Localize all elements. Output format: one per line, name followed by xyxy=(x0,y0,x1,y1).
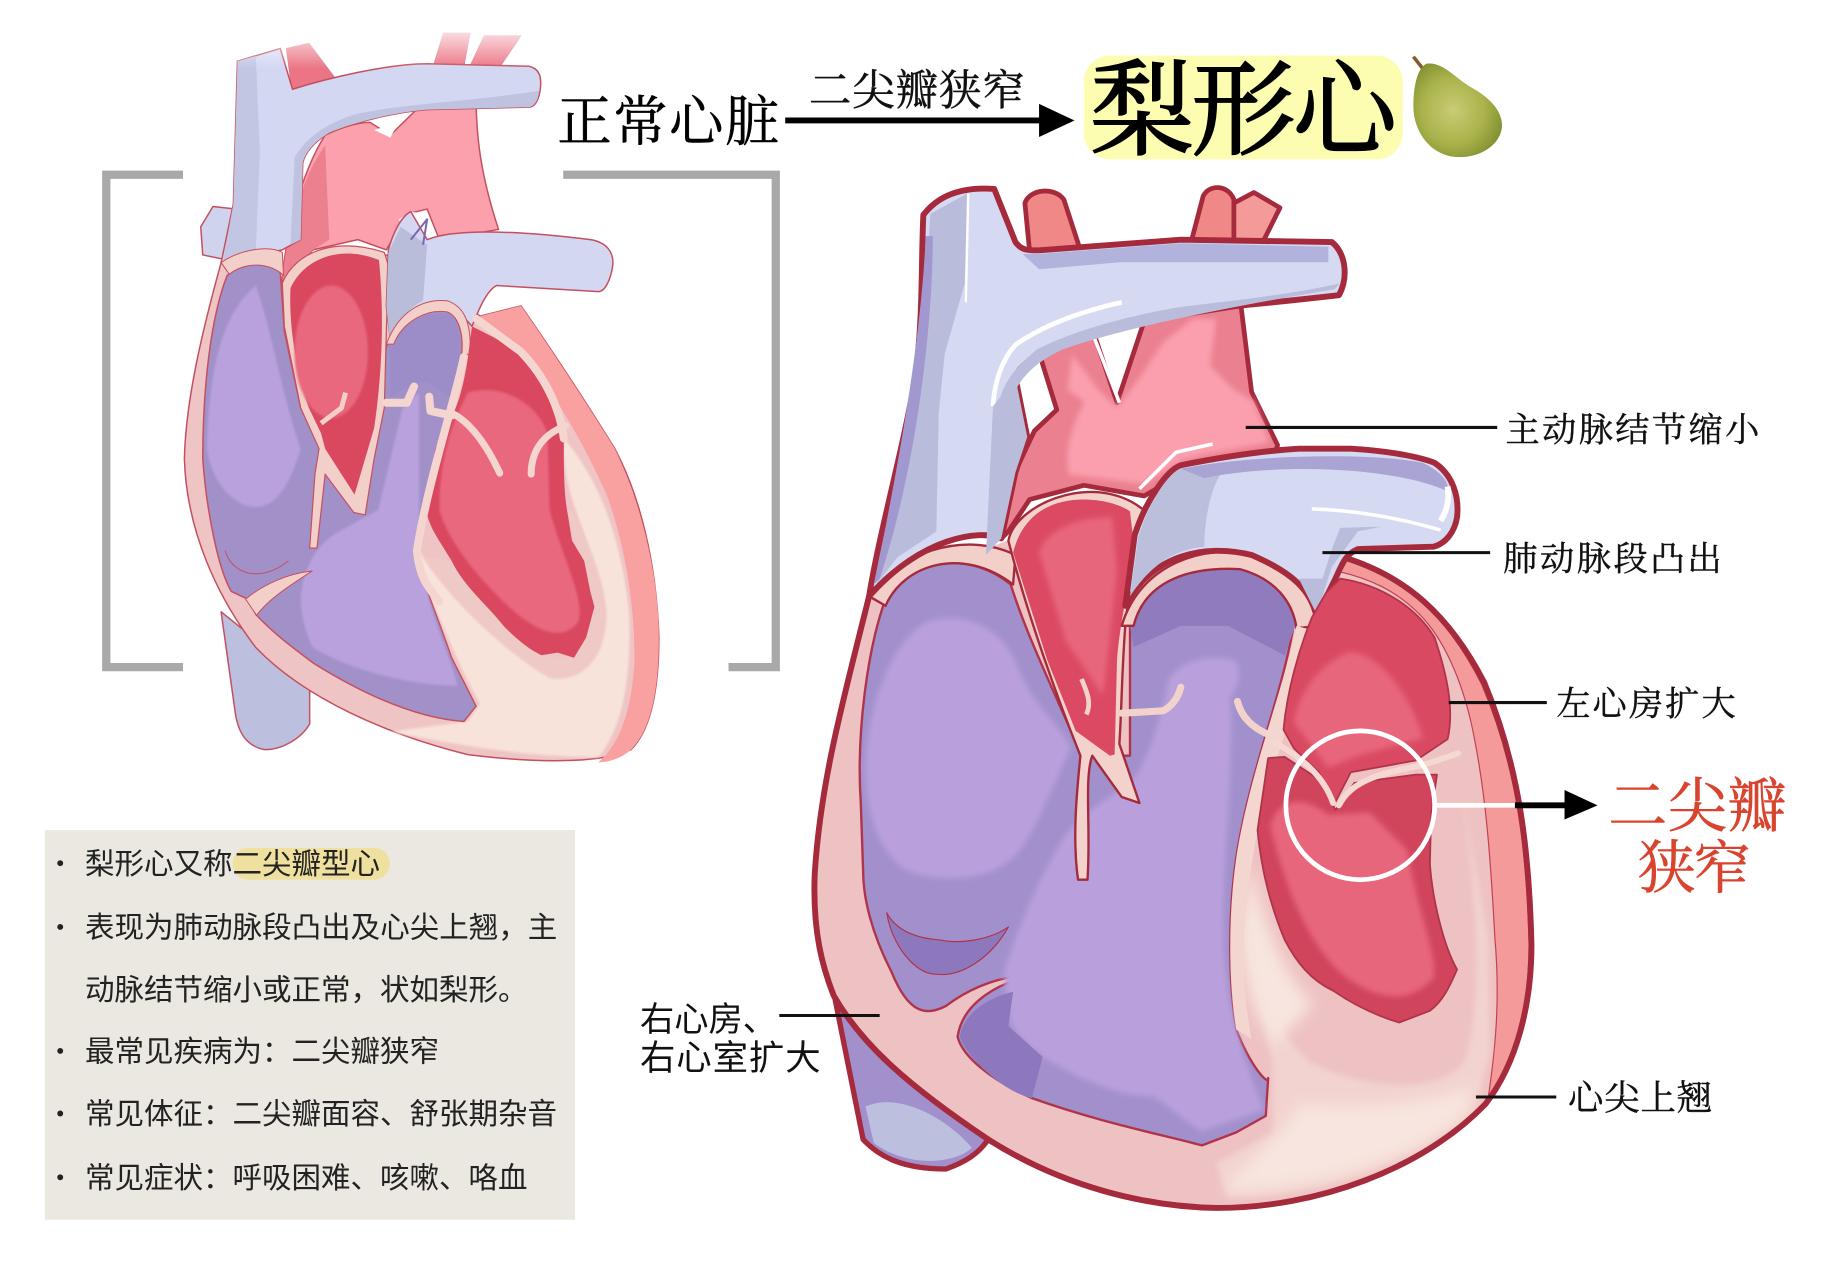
label: mitral stenosis line 1: 二尖瓣 xyxy=(1608,774,1787,840)
heart body xyxy=(814,537,1531,1208)
highlight on keyword xyxy=(233,848,390,880)
aortic root highlight xyxy=(1039,517,1117,695)
superior vena cava and right pulmonary artery xyxy=(221,48,541,263)
left ventricle highlight xyxy=(1271,802,1434,996)
superior vena cava and right pulmonary artery xyxy=(869,189,1345,596)
bullet text: 常见症状：呼吸困难、咳嗽、咯血 xyxy=(85,1162,528,1195)
label: mitral stenosis line 2: 狭窄 xyxy=(1638,836,1751,901)
right atrium and right ventricle xyxy=(860,563,1293,1145)
leader lines xyxy=(779,427,1556,1097)
bullet text: 最常见疾病为：二尖瓣狭窄 xyxy=(85,1036,439,1069)
aortic root chamber xyxy=(1013,499,1135,756)
bullet text: 表现为肺动脉段凸出及心尖上翘，主 xyxy=(85,912,557,945)
illustration: normal heart xyxy=(184,20,659,762)
white magnifier circle xyxy=(1286,731,1435,880)
bullet text: 常见体征：二尖瓣面容、舒张期杂音 xyxy=(85,1098,557,1131)
right atrium crescent line xyxy=(225,551,288,574)
bullet text xyxy=(85,848,557,1195)
top fade xyxy=(223,20,533,69)
aortic root wall xyxy=(1008,492,1151,880)
left atrium and ventricle xyxy=(427,326,594,658)
label: pulmonary segment: 肺动脉段凸出 xyxy=(1503,540,1722,578)
label: left atrium: 左心房扩大 xyxy=(1556,686,1736,724)
left ventricular wall outer strip xyxy=(480,306,659,762)
aortic branches xyxy=(1025,188,1280,252)
right atrium arch wall xyxy=(869,545,1015,606)
RVOT arch wall xyxy=(1122,552,1320,628)
pale myocardium xyxy=(390,438,629,757)
right atrium light area xyxy=(866,618,1071,878)
title: pear-shaped heart: 梨形心 xyxy=(1090,54,1401,169)
aortic root chamber xyxy=(290,254,382,495)
pulmonary valve strands xyxy=(1122,687,1279,738)
left atrium xyxy=(1283,579,1450,806)
left atrium highlight xyxy=(1294,652,1423,768)
left vein stub xyxy=(201,206,235,260)
bullet text: 梨形心又称二尖瓣型心 xyxy=(85,848,380,881)
illustration: enlarged pear-shaped heart xyxy=(814,188,1598,1208)
valve strand in aortic root xyxy=(321,393,346,423)
right atrium arch wall xyxy=(221,249,284,275)
heading: normal heart: 正常心脏 xyxy=(557,93,779,153)
right ventricle light area xyxy=(1004,658,1263,1131)
left ventricular outer wall strip xyxy=(1339,560,1529,1101)
aortic root highlight xyxy=(295,286,368,418)
right ventricle lower shadow xyxy=(960,992,1043,1098)
inferior vena cava lumen xyxy=(866,1102,972,1161)
heading: mitral stenosis above arrow: 二尖瓣狭窄 xyxy=(809,68,1025,115)
heart body xyxy=(184,255,659,761)
arrow: to mitral stenosis label xyxy=(1515,790,1598,819)
strand in aortic root xyxy=(1082,679,1089,714)
aortic root wall xyxy=(282,246,388,548)
aortic branches xyxy=(286,33,521,94)
aorta xyxy=(282,105,499,283)
RVOT arch wall xyxy=(386,301,470,354)
label: aortic knob: 主动脉结节缩小 xyxy=(1505,412,1760,450)
panel: summary bullets xyxy=(45,830,575,1220)
bullet markers xyxy=(57,860,63,1180)
icon: pear xyxy=(1413,57,1502,157)
white pointer line xyxy=(1436,803,1515,807)
interventricular septum xyxy=(1230,626,1318,1039)
heart outer outline xyxy=(814,557,1531,1208)
septal band xyxy=(246,571,312,615)
pale myocardium xyxy=(1216,791,1490,1197)
inferior vena cava xyxy=(221,612,310,750)
pale myocardium highlight xyxy=(1222,862,1474,1190)
RVOT dark top xyxy=(1130,567,1295,655)
label: right heart enlarged line 2: 右心室扩大 xyxy=(640,1038,821,1078)
valve leaflets and strands xyxy=(386,319,566,602)
inferior vena cava xyxy=(834,992,992,1169)
label: apex lifted: 心尖上翘 xyxy=(1568,1078,1712,1118)
right heart chambers xyxy=(203,264,476,721)
right atrium light area xyxy=(207,286,301,507)
mitral valve leaflets xyxy=(1273,742,1458,805)
bracket: normal heart frame xyxy=(106,175,776,667)
right atrium lower shadow xyxy=(887,913,1008,975)
right ventricle light area xyxy=(301,393,458,686)
label: right heart enlarged line 1: 右心房、 xyxy=(640,1001,777,1039)
aorta xyxy=(1001,306,1278,538)
main pulmonary artery xyxy=(1125,449,1458,616)
shade around left ventricle xyxy=(423,510,607,679)
left ventricle highlight xyxy=(439,390,580,633)
bullet text: 动脉结节缩小或正常，状如梨形。 xyxy=(85,974,528,1007)
right ventricular outflow top xyxy=(390,313,460,398)
arrow: normal to pear xyxy=(785,104,1074,137)
left ventricle xyxy=(1258,757,1457,1023)
pulmonary artery xyxy=(386,212,613,339)
